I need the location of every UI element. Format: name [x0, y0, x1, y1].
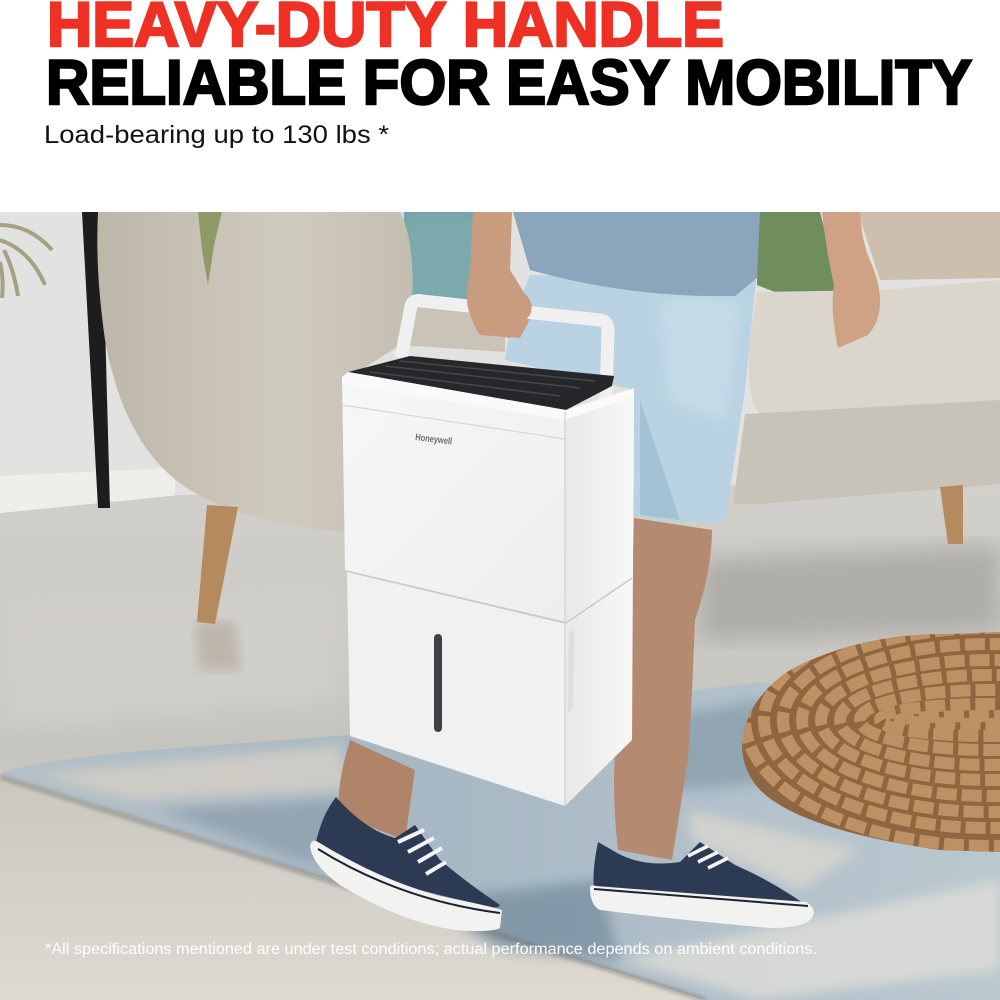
floor reflections: [700, 545, 1000, 640]
dehumidifier: [342, 277, 634, 806]
rug: [0, 682, 1000, 1000]
sofa cushion back: [858, 212, 1000, 280]
chair leg: [197, 505, 238, 624]
person: front leg: [339, 740, 415, 840]
plant stem: [198, 212, 222, 285]
back shoe: [590, 842, 814, 928]
rug pattern: [40, 700, 1000, 1000]
right side panel: [565, 390, 634, 806]
photo scene: [0, 212, 1000, 1000]
green plant leaves: [757, 212, 835, 292]
sofa base: [733, 400, 1000, 504]
title: black heading: RELIABLE FOR EASY MOBILITY: [46, 48, 972, 118]
person: shorts: [505, 275, 756, 522]
water window: [434, 634, 442, 732]
pouf: [742, 632, 1000, 852]
floor lamp pole: [82, 212, 110, 508]
top black panel: [348, 356, 614, 410]
top rim: [342, 372, 634, 420]
sofa leg: [940, 485, 963, 544]
hand over handle: [467, 277, 532, 338]
skirting board: [0, 468, 175, 513]
teal wall art: [404, 212, 473, 300]
footnote: *All specifications mentioned are under test conditions; actual performance depends on ambient conditions.: [45, 941, 817, 958]
subtitle: Load-bearing up to 130 lbs *: [44, 121, 389, 149]
person: back leg: [614, 518, 712, 860]
armchair: [97, 212, 413, 532]
plant left: [0, 225, 52, 298]
front upper body: [342, 377, 566, 622]
rug edge shadow: [0, 777, 705, 1000]
person: t-shirt: [513, 212, 760, 296]
seam between top and tank: [346, 571, 632, 623]
side grip: [568, 630, 574, 712]
wall: [0, 212, 1000, 512]
grille lines: [370, 361, 595, 396]
person: left arm: [468, 212, 535, 338]
logo: Honeywell: [415, 432, 453, 447]
laces: [398, 830, 446, 874]
person: right arm and hand: [822, 212, 880, 348]
handle: [401, 301, 608, 400]
front shoe: [310, 797, 502, 931]
laces: [688, 846, 728, 868]
sofa seat cushion: [749, 280, 1000, 414]
floor: [0, 480, 1000, 1000]
front lower body: [347, 572, 566, 806]
